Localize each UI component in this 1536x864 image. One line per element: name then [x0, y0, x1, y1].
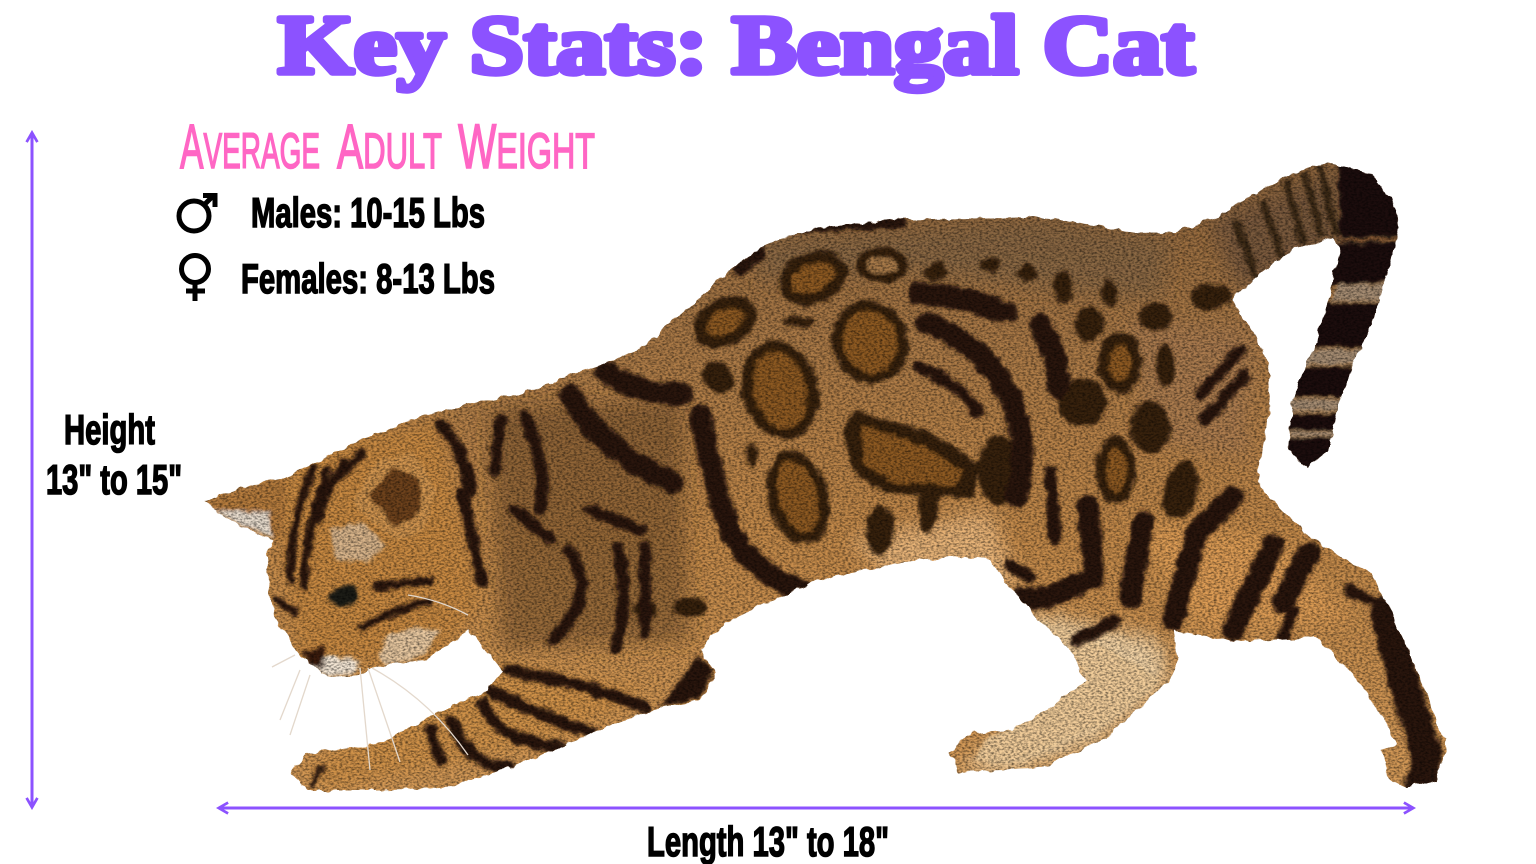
- cat paw toe line: [312, 765, 322, 788]
- cat ear white fur: [214, 510, 272, 538]
- cat forehead stripes: [278, 453, 431, 628]
- cat tail dark bands: [1288, 165, 1398, 468]
- icon: male symbol: [179, 195, 215, 231]
- arrow: length: [220, 806, 1412, 810]
- cat face cream patch: [330, 522, 385, 562]
- cat near ear: [352, 452, 436, 540]
- heading: average adult weight: ADULT: [337, 112, 442, 182]
- cat head: [203, 452, 440, 788]
- text: height label: [46, 406, 182, 503]
- cat body base coat: [190, 150, 1460, 800]
- text: females weight: Females: 8-13 Lbs: [241, 255, 495, 302]
- cat inner ear: [368, 466, 420, 528]
- cat nose: [302, 645, 326, 670]
- heading: average adult weight: WEIGHT: [458, 112, 595, 182]
- cat rosette rings: [633, 242, 1231, 620]
- cat muzzle: [308, 655, 360, 677]
- cat hind foreleg cream: [975, 618, 1150, 761]
- icon: female symbol: [182, 256, 208, 301]
- text: height label: 13" to 15": [46, 456, 182, 503]
- cat tail stripes: [1236, 165, 1336, 278]
- arrow: height: [30, 134, 34, 806]
- cat elbow shadow: [660, 655, 714, 708]
- cat chest cream: [378, 626, 440, 665]
- cat tail pale bands: [1289, 279, 1384, 440]
- text: males weight: Males: 10-15 Lbs: [251, 189, 485, 236]
- heading: average adult weight: [180, 112, 595, 182]
- title: Key Stats: Bengal Cat: [278, 0, 1194, 92]
- cat whiskers: [272, 595, 468, 770]
- text: height label: Height: [64, 406, 155, 453]
- cat stripes body: [431, 222, 1427, 782]
- illustration: bengal cat: [190, 150, 1460, 800]
- cat eye: [328, 582, 362, 610]
- cat colour shading: [270, 170, 1350, 790]
- text: length label: Length 13" to 18": [647, 818, 889, 864]
- cat rosette centres: [702, 257, 1131, 538]
- heading: average adult weight: AVERAGE: [180, 112, 320, 182]
- cat ear outer: [203, 478, 287, 540]
- cat markings: [431, 160, 1427, 782]
